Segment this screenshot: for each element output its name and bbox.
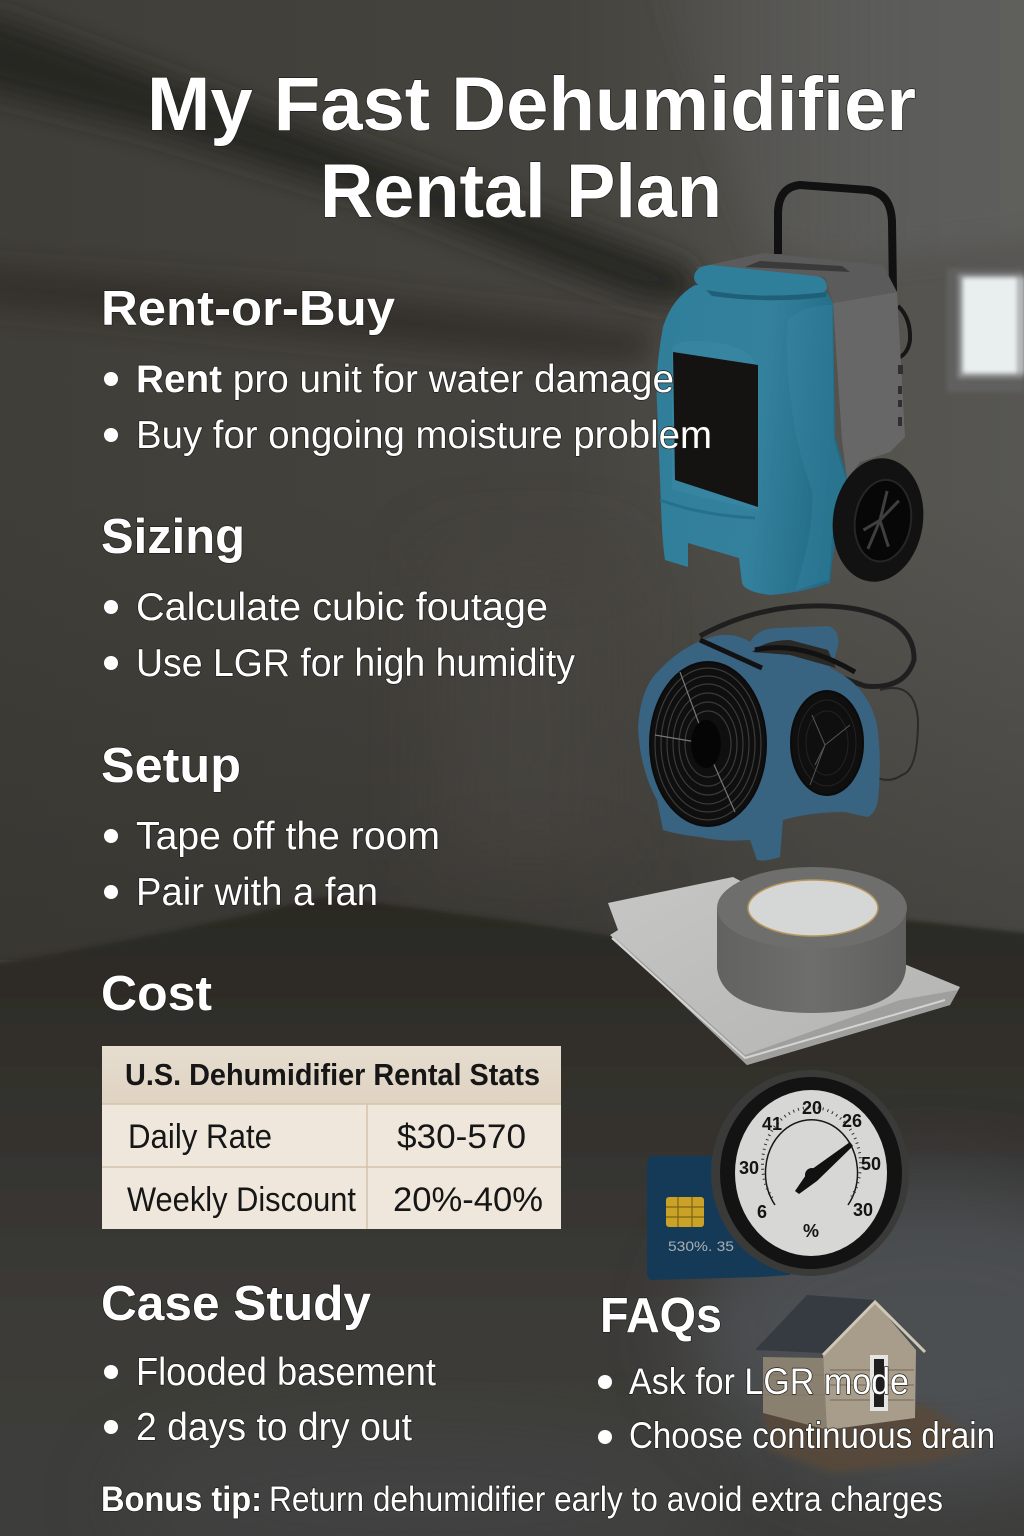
section: case study: Case Study xyxy=(101,1277,371,1331)
small grille xyxy=(791,691,863,795)
bonus tip: Return dehumidifier early to avoid extra charges xyxy=(269,1480,943,1519)
top cover xyxy=(695,253,897,303)
gauge: 41 xyxy=(762,1114,782,1134)
table: U.S. dehumidifier rental stats xyxy=(102,1046,561,1229)
side panel xyxy=(833,292,905,480)
section: FAQs: Ask for LGR mode xyxy=(629,1361,909,1402)
credit card xyxy=(647,1156,790,1280)
section: setup: Tape off the room xyxy=(136,815,440,858)
gauge needle xyxy=(795,1142,853,1194)
power cord loop xyxy=(898,306,910,358)
section: rent-or-buy: Rent-or-Buy xyxy=(101,282,395,336)
wheel xyxy=(825,452,931,588)
illustration: plastic sheeting and gray tape xyxy=(608,867,960,1065)
section: rent-or-buy: Rent pro unit for water damage xyxy=(136,358,674,401)
title: My Fast Dehumidifier xyxy=(147,62,916,147)
fan cords xyxy=(700,606,914,686)
teal body xyxy=(657,285,847,595)
section: setup: Pair with a fan xyxy=(136,871,378,914)
illustration: small wooden house xyxy=(755,1295,985,1473)
gauge: 30 xyxy=(853,1200,873,1220)
vents xyxy=(898,365,903,426)
section: sizing: Sizing xyxy=(101,510,245,564)
window in the back wall xyxy=(947,268,1024,392)
section: case study xyxy=(101,1277,436,1449)
title xyxy=(147,62,916,234)
section: sizing: Calculate cubic foutage xyxy=(136,586,548,629)
bonus tip: Bonus tip: xyxy=(101,1480,262,1519)
gauge: 20 xyxy=(802,1098,822,1118)
gauge: 50 xyxy=(861,1154,881,1174)
illustration: air mover fan xyxy=(638,606,918,861)
section: case study: Flooded basement xyxy=(136,1351,436,1394)
title: Rental Plan xyxy=(320,149,722,234)
tape roll xyxy=(717,908,906,1013)
table: U.S. dehumidifier rental stats: Weekly Discount xyxy=(127,1181,357,1219)
section: setup xyxy=(101,739,440,914)
illustration: credit card and humidity gauge xyxy=(647,1070,909,1280)
trolley handle xyxy=(778,185,893,292)
section: sizing: Use LGR for high humidity xyxy=(136,642,575,685)
recess around panel xyxy=(672,341,758,510)
section: setup: Setup xyxy=(101,739,241,793)
table: U.S. dehumidifier rental stats: U.S. Dehumidifier Rental Stats xyxy=(125,1057,540,1092)
credit card: 530%. 35 xyxy=(668,1238,734,1254)
gauge: % xyxy=(803,1221,819,1241)
large grille xyxy=(650,662,766,826)
black intake panel xyxy=(673,352,758,507)
gauge: 30 xyxy=(739,1158,759,1178)
section: case study: 2 days to dry out xyxy=(136,1406,412,1449)
section: rent-or-buy: Buy for ongoing moisture problem xyxy=(136,414,712,457)
gauge: 26 xyxy=(842,1111,862,1131)
table: U.S. dehumidifier rental stats: 20%-40% xyxy=(393,1181,543,1219)
gauge: 6 xyxy=(757,1202,767,1222)
section: FAQs: FAQs xyxy=(600,1289,722,1343)
table: U.S. dehumidifier rental stats: Daily Rate xyxy=(128,1118,272,1156)
fan housing xyxy=(638,626,880,861)
gauge xyxy=(711,1070,909,1276)
section: rent-or-buy xyxy=(101,282,712,457)
illustration: portable dehumidifier xyxy=(657,185,931,595)
carrying handle opening xyxy=(752,640,836,668)
section: sizing xyxy=(101,510,575,685)
table: U.S. dehumidifier rental stats: $30-570 xyxy=(397,1118,526,1156)
section: cost heading: Cost xyxy=(101,967,212,1021)
section: FAQs xyxy=(598,1289,995,1456)
